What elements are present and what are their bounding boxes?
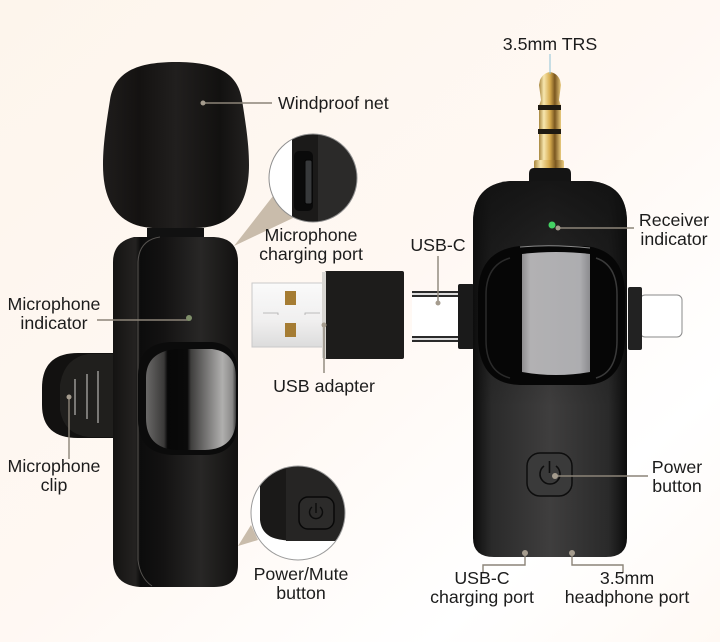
- label: receiver indicator: Receiver: [639, 210, 709, 230]
- label: USB-C charging port: charging port: [430, 587, 534, 607]
- top shading: [473, 181, 627, 557]
- label: 3.5mm headphone port: headphone port: [565, 587, 689, 607]
- neck: [147, 228, 204, 237]
- label: microphone charging port: charging port: [259, 244, 363, 264]
- side collars: [458, 284, 642, 350]
- circle outline: [251, 466, 345, 560]
- label: power mute button: button: [276, 583, 326, 603]
- label: 3.5mm headphone port: 3.5mm: [600, 568, 654, 588]
- label: microphone clip: clip: [41, 475, 67, 495]
- label: windproof net: Windproof net: [278, 93, 389, 113]
- USB-C plug: [412, 291, 459, 342]
- receiver: [473, 168, 627, 557]
- body seam: [138, 237, 160, 586]
- label: microphone indicator: indicator: [20, 313, 88, 333]
- power button: [527, 453, 572, 496]
- circle outline: [269, 134, 357, 222]
- label: power button: button: [652, 476, 702, 496]
- body: [473, 181, 627, 557]
- neck: [529, 168, 571, 182]
- glossy window: [478, 246, 625, 385]
- glossy window: [138, 342, 238, 455]
- leader lines and dots: [66, 54, 648, 573]
- body: [113, 237, 238, 587]
- label: receiver indicator: indicator: [640, 229, 708, 249]
- label: microphone clip: Microphone: [8, 456, 100, 476]
- USB adapter: [252, 271, 404, 359]
- receiver LED: [548, 222, 556, 228]
- microphone clip: [42, 353, 116, 438]
- label: USB-C: USB-C: [410, 235, 466, 255]
- zoom wedge: power mute: [238, 525, 258, 546]
- label: power mute button: Power/Mute: [254, 564, 348, 584]
- zoom wedge: charging port: [234, 196, 293, 246]
- label: power button: Power: [652, 457, 702, 477]
- microphone: [103, 62, 249, 587]
- label: USB adapter: USB adapter: [273, 376, 375, 396]
- 3.5mm jack: [534, 72, 564, 169]
- label: USB-C charging port: USB-C: [454, 568, 510, 588]
- label: microphone indicator: Microphone: [8, 294, 100, 314]
- zoom circle: charging port: [269, 134, 358, 224]
- windproof net head: [103, 62, 249, 228]
- label: 3.5mm TRS: 3.5mm TRS: [503, 34, 597, 54]
- zoom circle: power mute button: [252, 466, 344, 541]
- label: microphone charging port: Microphone: [265, 225, 357, 245]
- lightning plug: [640, 295, 682, 337]
